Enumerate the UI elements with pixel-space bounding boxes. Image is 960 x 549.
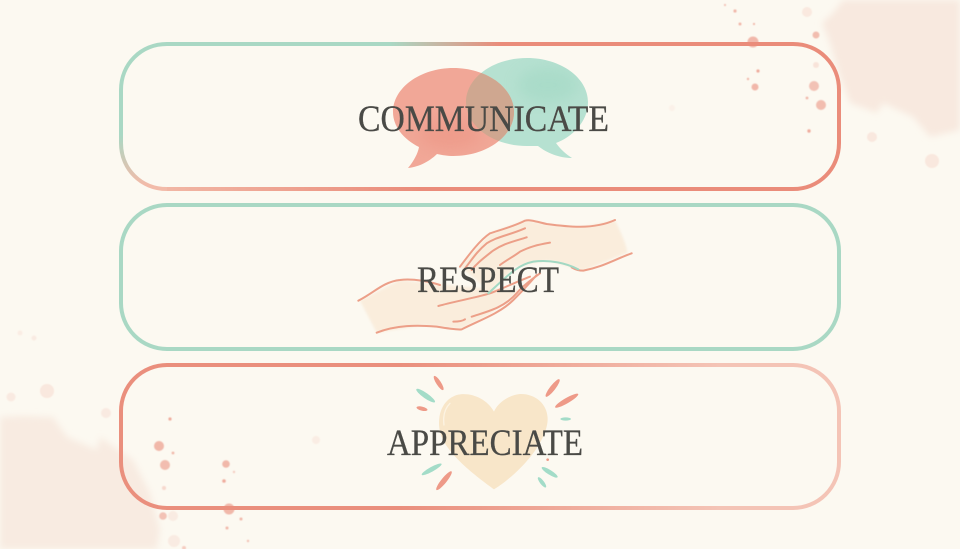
panel outline: respect (121, 205, 839, 349)
panel: appreciate (121, 365, 839, 508)
icon: heart with rays (415, 375, 580, 492)
panel: communicate (121, 44, 839, 189)
splatter: top right (724, 4, 939, 168)
splatter: bottom left (6, 105, 675, 549)
label: communicate: COMMUNICATE (358, 99, 609, 140)
watercolor wash: top right (822, 0, 960, 137)
panel: respect (121, 205, 839, 349)
panel outline: communicate (121, 44, 839, 189)
watercolor wash: bottom left (0, 416, 160, 549)
panel outline: appreciate (121, 365, 839, 508)
icon: two hands (358, 220, 632, 333)
label: appreciate: APPRECIATE (387, 423, 583, 464)
label: respect: RESPECT (417, 260, 559, 301)
icon: speech bubbles (393, 58, 588, 168)
